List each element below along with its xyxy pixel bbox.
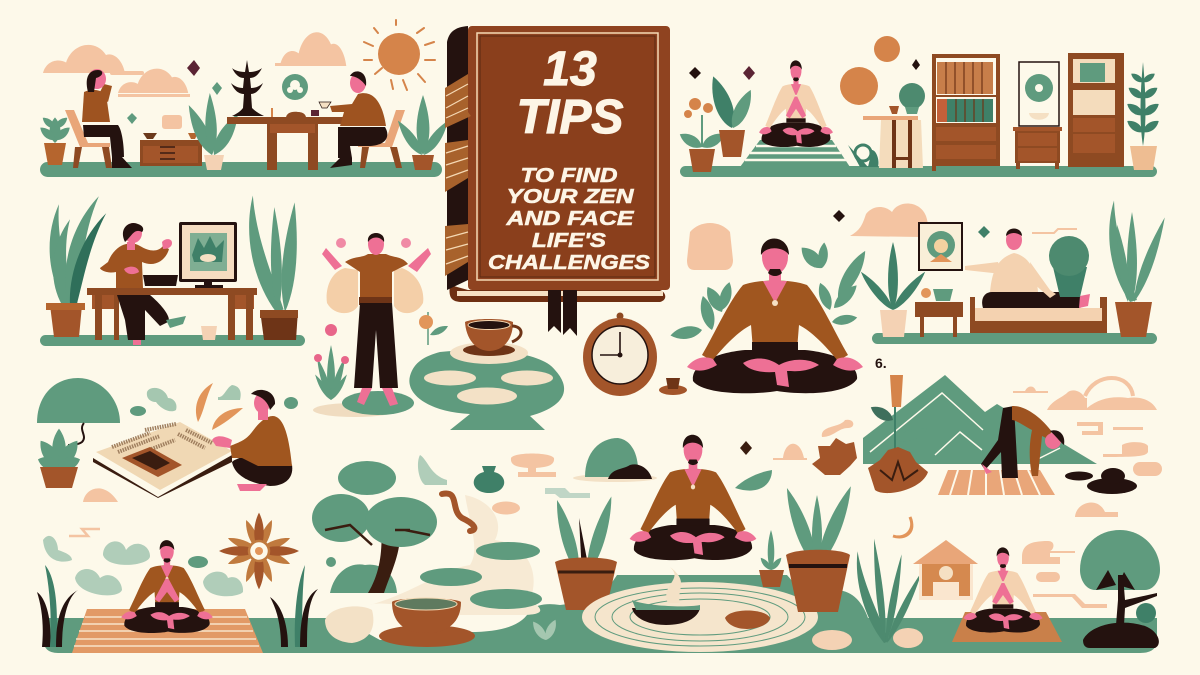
bowl and saucer: [379, 598, 475, 647]
frame: [919, 223, 962, 270]
bending person: [981, 406, 1064, 478]
tea cup and stones: [409, 319, 564, 430]
scene: top right meditation room: [677, 36, 1161, 177]
scene: bed rest: [833, 200, 1169, 344]
framed flower: [1019, 62, 1059, 126]
plant right: [394, 95, 452, 170]
scene: two people at tea table: [38, 20, 452, 177]
diamonds: [833, 210, 990, 238]
mandala flower: [219, 513, 299, 589]
sitting man: [212, 390, 292, 491]
title text: YOUR ZEN: [506, 185, 635, 208]
scene: bottom left yoga: [37, 513, 318, 653]
small plant: [759, 530, 784, 587]
man at table: [319, 71, 387, 168]
desk: [87, 288, 257, 340]
plant left: [38, 115, 72, 165]
pine plant: [1125, 62, 1161, 170]
flower plant: [313, 324, 349, 402]
pagoda tree: [231, 60, 264, 116]
spine bands: [445, 74, 471, 276]
step number: 6.: [875, 355, 887, 371]
main meditating figure: [669, 223, 871, 393]
sand blob: [325, 606, 373, 643]
title text: [488, 43, 650, 274]
pages: [450, 285, 665, 302]
bed: [970, 297, 1107, 333]
succulent pot: [1049, 236, 1089, 297]
meditator: [759, 60, 833, 147]
man at desk: [100, 223, 186, 345]
grass: [844, 538, 925, 645]
book cover with title: [445, 26, 670, 336]
mat: [952, 612, 1062, 642]
peach swirl: [822, 420, 853, 437]
standing figure with robe: [313, 233, 448, 417]
vase: [474, 466, 504, 493]
meditator: [963, 547, 1043, 633]
ground: [40, 335, 305, 346]
peach stroke: [1032, 229, 1077, 233]
arms raised: [322, 248, 431, 272]
sand path: [370, 495, 540, 615]
stepping stones: [420, 542, 542, 609]
tree: [1080, 530, 1160, 648]
small house: [913, 540, 978, 600]
crescent: [893, 517, 912, 537]
mountains: [863, 375, 1097, 464]
tree: [312, 461, 437, 593]
mat: [740, 140, 850, 167]
feet: [357, 388, 398, 406]
bottom ground band: [43, 575, 1157, 653]
small pot: [201, 326, 217, 340]
small ground plant: [530, 618, 559, 642]
shirt: [345, 254, 408, 298]
title text: 13: [543, 43, 597, 96]
leaves: [669, 242, 871, 342]
table: [227, 108, 345, 170]
peach and pale shapes: [418, 454, 590, 514]
cabinet: [1013, 127, 1062, 169]
robe sleeves: [327, 268, 423, 313]
meditator: [121, 540, 213, 633]
trousers: [359, 297, 392, 305]
peach lines: [1022, 541, 1107, 608]
potted plant centre: [183, 93, 244, 170]
person: [687, 238, 863, 393]
side table: [915, 288, 963, 337]
leaf: [735, 470, 772, 491]
reclining person: [965, 228, 1090, 308]
large plant right: [233, 195, 301, 340]
large plant left: [39, 193, 106, 337]
green disc: [409, 350, 564, 430]
pale green blobs: [43, 536, 243, 596]
title text: CHALLENGES: [488, 251, 650, 274]
clouds: [43, 32, 346, 97]
diamonds: [689, 59, 920, 80]
flower plant: [677, 98, 727, 172]
head: [336, 233, 411, 255]
potted plant: [551, 495, 617, 610]
lotus plant: [868, 375, 929, 493]
diamond: [740, 441, 752, 455]
mat: [72, 609, 263, 653]
spine: [447, 26, 468, 290]
ground: [872, 333, 1157, 344]
small diamonds: [127, 60, 222, 124]
zen raked circle: [582, 567, 818, 652]
small plant: [188, 556, 208, 568]
cover: [468, 26, 670, 290]
rocks: [1065, 468, 1137, 494]
round emblem: [282, 74, 308, 100]
peach mound: [83, 488, 118, 502]
peach clouds: [1013, 378, 1162, 517]
monitor: [179, 222, 237, 288]
plant: [858, 242, 928, 337]
scene: reading the paper: [35, 378, 298, 502]
chair left: [65, 110, 112, 168]
title text: TO FIND: [520, 164, 618, 187]
bonsai: [37, 378, 120, 445]
large plant: [1096, 200, 1169, 337]
swirl and leaves: [130, 383, 298, 430]
sun: [364, 20, 435, 90]
scene: garden lower centre: [312, 420, 925, 652]
peach strokes: [69, 529, 100, 536]
circles: [840, 36, 900, 105]
clock: [583, 312, 687, 396]
saucer: [450, 342, 528, 364]
right grass: [270, 565, 318, 647]
newspaper: [93, 422, 232, 498]
woman: [82, 69, 132, 168]
leafy plant: [705, 73, 757, 157]
rock dome: [573, 438, 657, 482]
centre meditator: [630, 435, 756, 560]
peach emblem: [687, 223, 733, 270]
bookshelf: [932, 54, 1000, 171]
cloud: [850, 203, 928, 237]
ground: [40, 162, 442, 177]
stones: [812, 628, 923, 650]
title text: TIPS: [517, 91, 623, 144]
shelf: [1068, 53, 1124, 167]
sand and green base: [313, 403, 397, 417]
cabinet: [140, 115, 202, 166]
ground: [680, 166, 1157, 177]
mat: [938, 470, 1055, 495]
ribbon: [548, 290, 577, 336]
title text: LIFE'S: [532, 229, 606, 252]
scene: bottom right: [893, 517, 1160, 648]
succulent: [35, 429, 83, 488]
scene: mountain stretch: [863, 375, 1162, 517]
stool: [863, 83, 925, 168]
cup: [465, 319, 513, 351]
succulent: [812, 438, 857, 475]
scene: desk worker: [39, 193, 305, 346]
small cup: [659, 378, 687, 395]
swirl: [442, 493, 474, 531]
peach mound: [773, 444, 807, 460]
large plant: [780, 484, 857, 612]
watering can: [848, 145, 879, 167]
small orange flower: [419, 312, 448, 345]
chair right: [358, 110, 405, 168]
title text: AND FACE: [505, 207, 635, 230]
left grass: [37, 565, 78, 647]
